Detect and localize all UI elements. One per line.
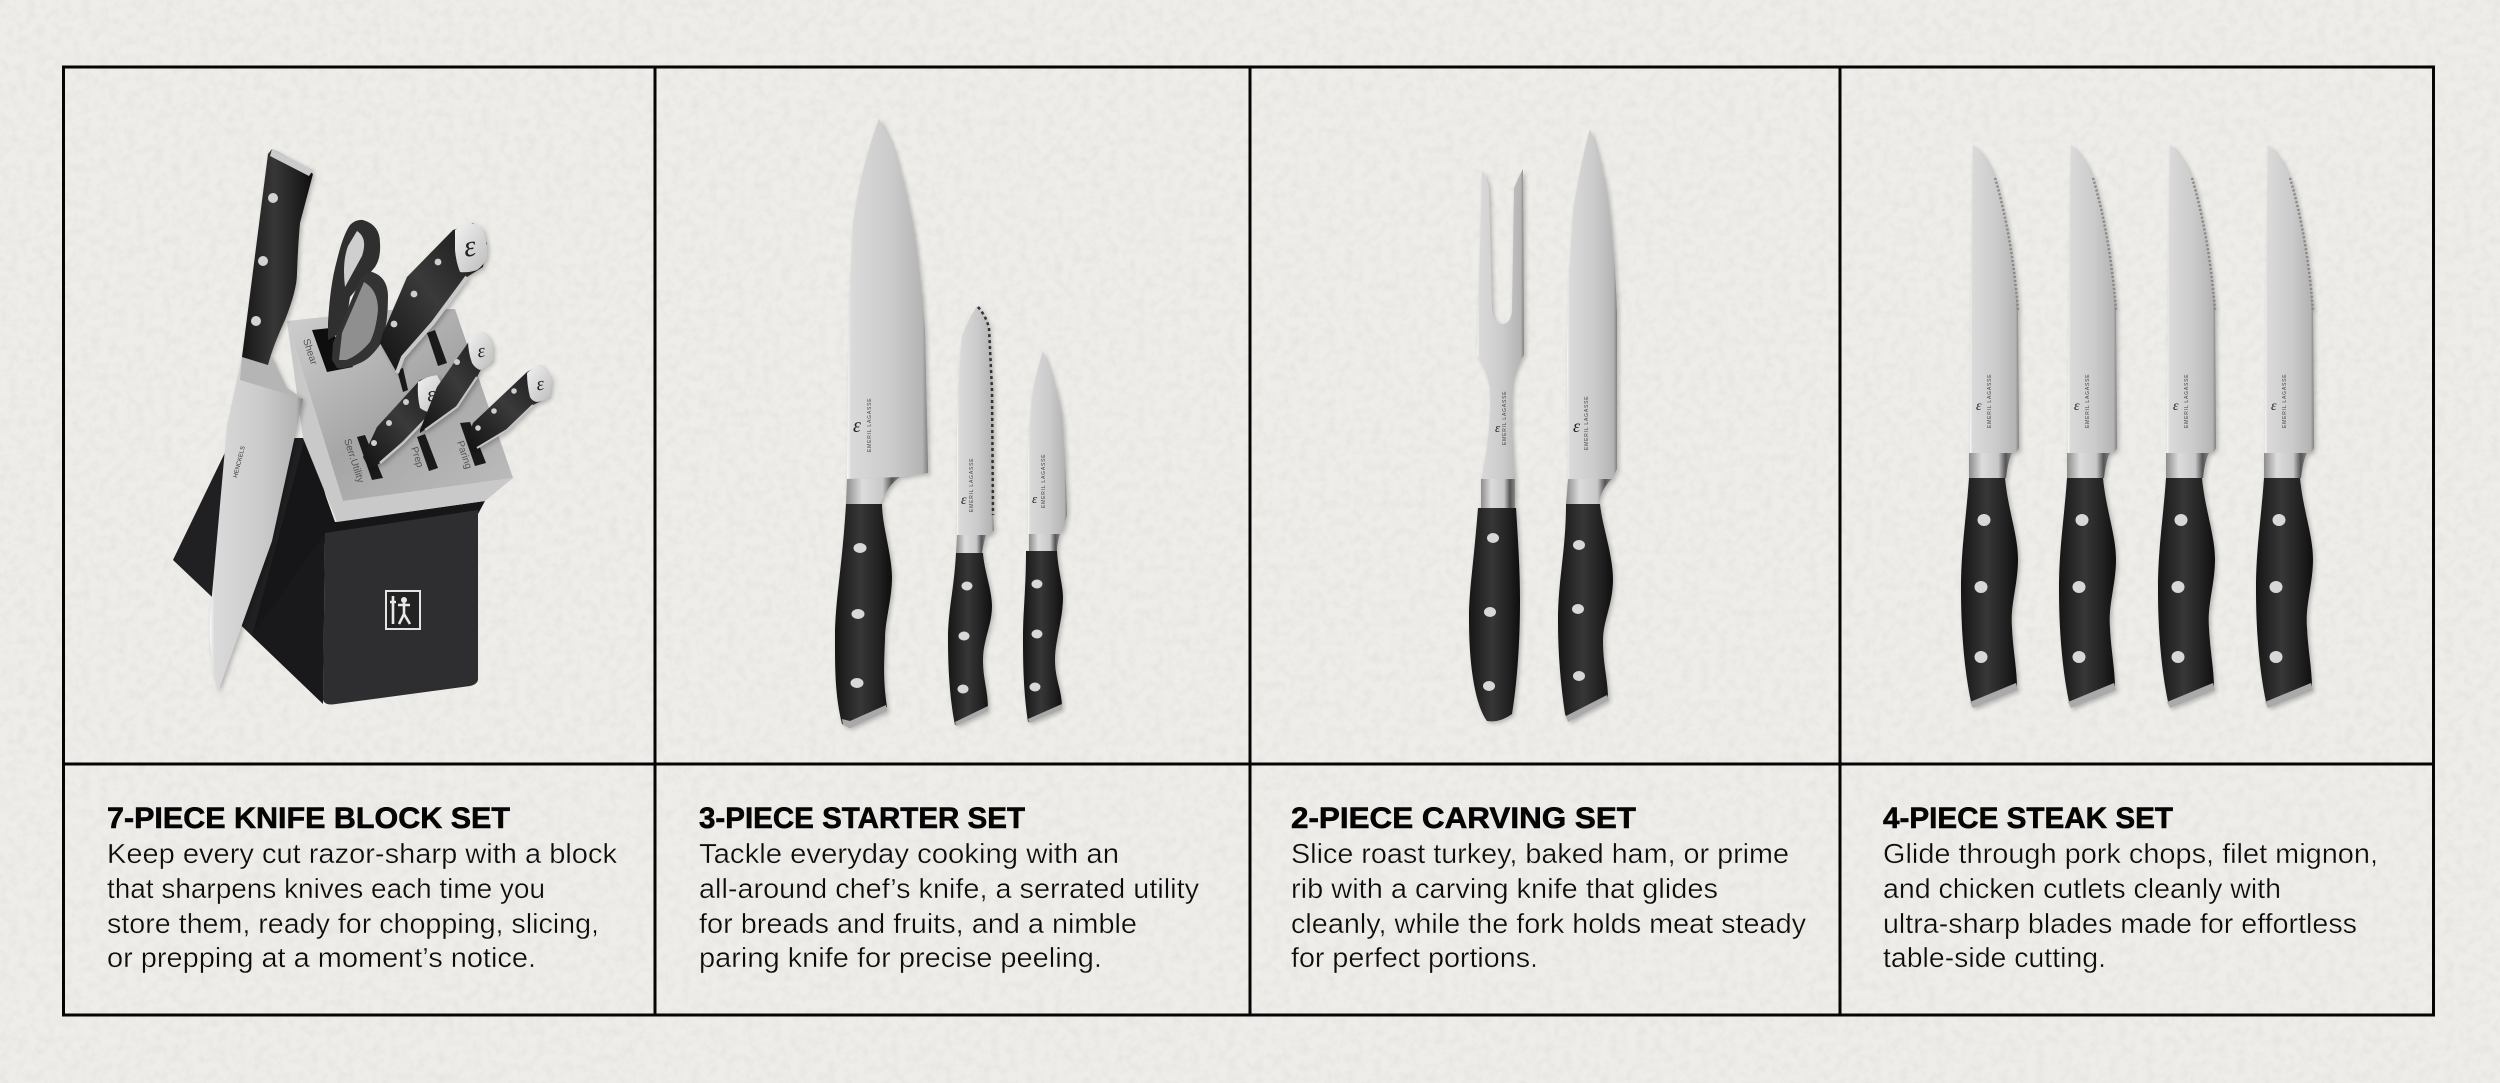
panel: 3-piece starter set	[655, 67, 1250, 1014]
knife: large handle top right: ε	[462, 229, 478, 264]
small knife: serrated utility: ε	[425, 382, 438, 407]
image: paring knife: EMERIL LAGASSE	[1041, 454, 1047, 508]
image: steak knife 4: EMERIL LAGASSE	[2282, 374, 2288, 428]
steel top plate	[287, 309, 513, 522]
description	[1291, 838, 1806, 973]
description	[107, 838, 618, 973]
description: all-around chef’s knife, a serrated utility	[699, 873, 1199, 904]
description: that sharpens knives each time you	[107, 873, 545, 904]
image: carving fork: ε	[1495, 420, 1501, 435]
description: ultra-sharp blades made for effortless	[1883, 908, 2357, 939]
steel top plate: Paring	[454, 440, 474, 470]
image: steak knife 3: EMERIL LAGASSE	[2184, 374, 2190, 428]
small knife: paring: ε	[535, 374, 546, 395]
small knife: prep: ε	[476, 341, 487, 362]
image: steak knife 3	[2158, 145, 2216, 708]
steel top plate: Serr.Utility	[341, 438, 366, 484]
image: steak knife 2	[2059, 145, 2117, 708]
knife: chef knife leaning on block: HENCKELS	[233, 446, 247, 478]
image: carving knife: ε	[1573, 416, 1581, 436]
image: chef knife: EMERIL LAGASSE	[867, 398, 873, 452]
panel: 4-piece steak set	[1840, 67, 2433, 1014]
scissors	[328, 220, 388, 368]
description: table-side cutting.	[1883, 942, 2106, 973]
image: paring knife: ε	[1032, 491, 1038, 506]
knife: chef knife leaning on block	[210, 149, 313, 692]
description: Glide through pork chops, filet mignon,	[1883, 838, 2378, 869]
description: or prepping at a moment’s notice.	[107, 942, 536, 973]
description: Tackle everyday cooking with an	[699, 838, 1119, 869]
heading: 3-PIECE STARTER SET	[699, 802, 1025, 835]
description	[699, 838, 1199, 973]
small knife: serrated utility	[363, 375, 445, 470]
image: serrated utility knife: ε	[961, 493, 967, 508]
small knife: prep	[420, 332, 493, 433]
small knife: paring	[467, 365, 552, 450]
image: serrated utility knife	[948, 306, 994, 726]
image: chef knife	[835, 119, 928, 728]
image: steak knife 4	[2256, 145, 2314, 708]
description	[1883, 838, 2378, 973]
image: steak knife 2: EMERIL LAGASSE	[2085, 374, 2091, 428]
panel: 2-piece carving set	[1250, 67, 1840, 1014]
image: carving knife: EMERIL LAGASSE	[1584, 396, 1590, 450]
image: knife block with knives	[173, 149, 552, 704]
description: Keep every cut razor-sharp with a block	[107, 838, 618, 869]
knife: large handle top right	[380, 223, 487, 373]
steel top plate: Prep	[408, 446, 425, 469]
description: and chicken cutlets cleanly with	[1883, 873, 2281, 904]
block back wedge	[173, 438, 335, 636]
image: steak knife 3: ε	[2173, 399, 2179, 414]
description: paring knife for precise peeling.	[699, 942, 1102, 973]
heading: 2-PIECE CARVING SET	[1291, 802, 1636, 835]
image: carving knife	[1558, 129, 1617, 722]
description: store them, ready for chopping, slicing,	[107, 908, 599, 939]
image: steak knife 2: ε	[2074, 399, 2080, 414]
image: serrated utility knife: EMERIL LAGASSE	[969, 458, 975, 512]
description: for perfect portions.	[1291, 942, 1538, 973]
logo badge	[386, 591, 420, 629]
block body	[252, 438, 485, 704]
image: carving fork: EMERIL LAGASSE	[1502, 391, 1508, 445]
description: rib with a carving knife that glides	[1291, 873, 1718, 904]
image: paring knife	[1023, 351, 1067, 723]
heading: 4-PIECE STEAK SET	[1883, 802, 2173, 835]
image: carving fork	[1469, 169, 1524, 721]
panel: 7-piece knife block set	[64, 67, 655, 1014]
description: cleanly, while the fork holds meat steady	[1291, 908, 1806, 939]
image: steak knife 4: ε	[2271, 399, 2277, 414]
description: Slice roast turkey, baked ham, or prime	[1291, 838, 1789, 869]
image: steak knife 1: ε	[1976, 399, 1982, 414]
description: for breads and fruits, and a nimble	[699, 908, 1137, 939]
image: chef knife: ε	[853, 415, 861, 437]
image: steak knife 1: EMERIL LAGASSE	[1987, 374, 1993, 428]
heading: 7-PIECE KNIFE BLOCK SET	[107, 802, 510, 835]
image: steak knife 1	[1961, 145, 2019, 708]
steel top plate: Shear	[300, 338, 319, 367]
